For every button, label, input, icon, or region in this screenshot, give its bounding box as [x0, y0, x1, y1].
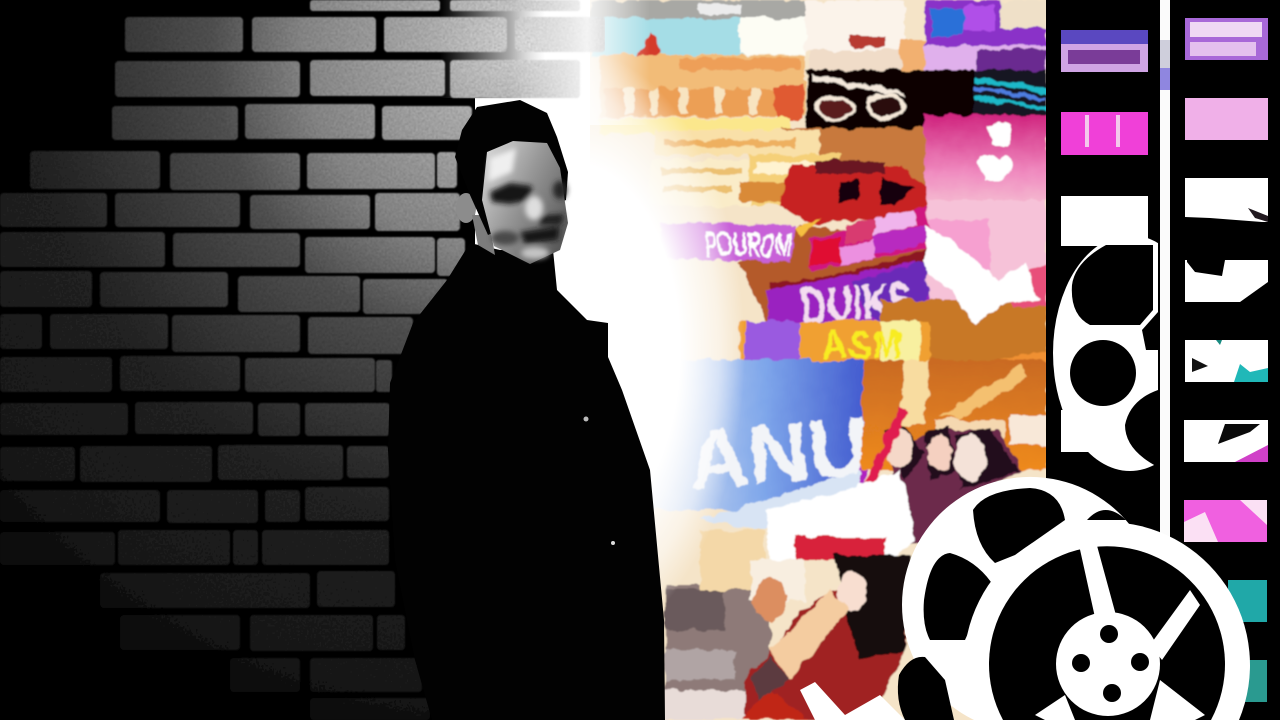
icon: upper film reel [1053, 238, 1158, 471]
front reel [964, 510, 1250, 720]
orange poster band [600, 55, 805, 134]
panel: film strip [1046, 0, 1280, 720]
yellow torn text band [650, 130, 845, 205]
banner: POUROM [704, 226, 792, 264]
right side purple posters [925, 0, 1047, 70]
seam light over top bricks and collage edge [510, 0, 650, 125]
blue poster: ANU [683, 398, 873, 508]
lower-left reel fragment [800, 682, 905, 720]
teal striped panel [975, 70, 1047, 116]
ASM band [740, 322, 930, 367]
panel: brick wall [0, 0, 605, 720]
coat [388, 243, 665, 720]
facial shadows [488, 148, 567, 259]
orange poster [862, 360, 1047, 470]
middle brown wedge and right pink [780, 128, 930, 195]
ASM band: ASM [822, 323, 902, 367]
panel: colour poster collage [590, 0, 1047, 720]
neck [472, 215, 495, 255]
grey stone lower left [665, 530, 805, 720]
banner [660, 218, 820, 264]
top strip of grey posters [590, 0, 930, 80]
face [482, 141, 568, 264]
white triangle poster [765, 470, 915, 560]
purple title block: DUIKS [799, 271, 915, 337]
coat button glints [584, 416, 588, 422]
collage base [590, 0, 1047, 720]
film strip body [1046, 0, 1280, 720]
centre white line [1160, 0, 1170, 540]
panel: standing man silhouette [388, 100, 665, 720]
white shapes in pink panel [978, 122, 1012, 180]
left column frames [1061, 30, 1148, 452]
white light glow [405, 50, 745, 650]
blue poster [640, 360, 895, 530]
rear reel [898, 477, 1158, 720]
three faces group [830, 405, 1022, 560]
checker band [770, 205, 937, 298]
red black barrel shape [780, 165, 926, 225]
panel: white light behind figure [440, 0, 1047, 720]
icon: front film reels [800, 477, 1250, 720]
red figure [636, 30, 667, 88]
bricks [0, 0, 605, 720]
hair [455, 100, 568, 235]
right column frames [1184, 18, 1268, 702]
wall backing [0, 98, 475, 720]
black ticket panel [806, 70, 978, 128]
red cloak figures [740, 555, 915, 720]
ear [456, 193, 476, 223]
purple title block [767, 260, 930, 337]
brown wedge below barrel [740, 225, 930, 330]
right orange and white torn shape [880, 300, 1047, 420]
